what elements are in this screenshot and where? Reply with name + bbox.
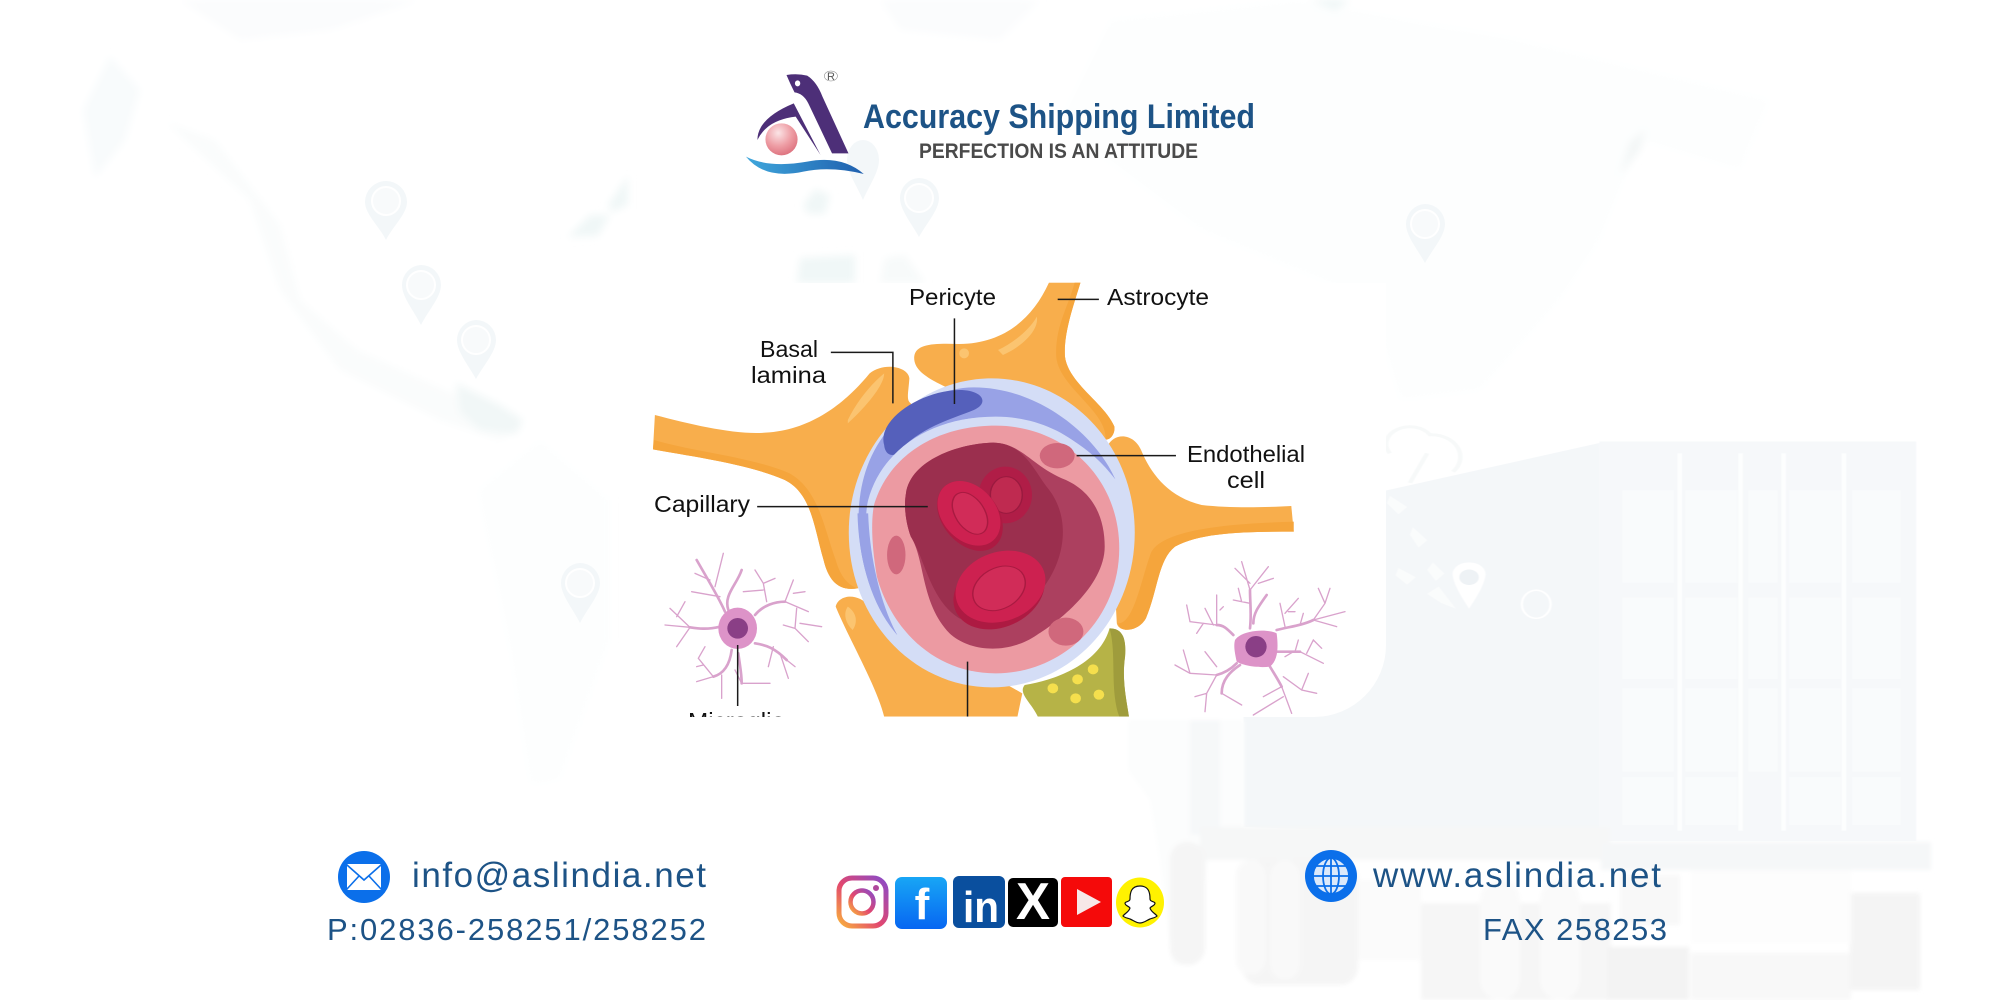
leader lines bbox=[757, 299, 1176, 717]
truck cab bbox=[1128, 720, 1244, 965]
microglia neuron left bbox=[665, 553, 822, 706]
email address: info@aslindia.net bbox=[412, 856, 706, 895]
label: Endothelial cell: cell bbox=[1227, 467, 1265, 493]
label: Endothelial cell bbox=[1187, 441, 1305, 493]
registered mark: R bbox=[827, 71, 835, 83]
icon: Facebook bbox=[895, 877, 947, 929]
blood-brain barrier illustration bbox=[653, 283, 1294, 717]
social media icons bbox=[839, 873, 1164, 932]
red blood cells bbox=[937, 466, 1046, 630]
astrocyte: top arm shading bbox=[1056, 283, 1114, 439]
astrocyte: right arm bbox=[1107, 436, 1294, 630]
icon: mail bbox=[338, 851, 390, 903]
basal lamina and pericyte sheath bbox=[859, 387, 1115, 635]
label: Endothelial cell: Endothelial bbox=[1187, 441, 1305, 467]
illustration labels bbox=[654, 284, 1305, 734]
white illustration panel bbox=[640, 283, 1386, 717]
lumen bbox=[905, 443, 1105, 649]
astrocyte: right arm shading bbox=[1118, 522, 1294, 630]
container truck background bbox=[1128, 427, 1931, 1000]
microglia neuron right bbox=[1175, 562, 1345, 715]
rear axle wheels bbox=[1242, 860, 1358, 985]
astrocyte: bottom-left highlight bbox=[845, 607, 856, 630]
chassis bbox=[1200, 827, 1610, 860]
label: Basal lamina: lamina bbox=[751, 362, 826, 388]
icon: LinkedIn bbox=[953, 876, 1005, 932]
endothelium outer ring bbox=[866, 416, 1075, 514]
astrocyte: top arm bbox=[914, 283, 1114, 440]
contact: email bbox=[327, 851, 706, 947]
phone: P:02836-258251/258252 bbox=[327, 912, 706, 947]
icon: globe bbox=[1305, 850, 1357, 902]
icon: Instagram bbox=[839, 878, 886, 926]
label: Basal lamina bbox=[751, 336, 826, 388]
astrocyte: left arm bbox=[653, 367, 930, 589]
astrocyte: left arm shading bbox=[653, 440, 858, 589]
label: Pericyte: Pericyte bbox=[909, 284, 996, 310]
icon: Snapchat bbox=[1116, 878, 1164, 928]
contact: web and fax bbox=[1305, 850, 1667, 947]
label: Microglia: Microglia bbox=[688, 708, 785, 734]
tagline: PERFECTION IS AN ATTITUDE bbox=[919, 140, 1198, 163]
icon: YouTube bbox=[1061, 877, 1112, 927]
icon: X: X bbox=[1016, 873, 1050, 931]
astrocyte: left arm highlight bbox=[848, 373, 884, 423]
label: Astrocyte: Astrocyte bbox=[1107, 284, 1209, 310]
fax: FAX 258253 bbox=[1483, 912, 1667, 947]
website: www.aslindia.net bbox=[1372, 856, 1661, 895]
label: Basal lamina: Basal bbox=[760, 336, 818, 362]
background world map bbox=[83, 0, 1770, 785]
astrocyte: highlights bbox=[959, 317, 1037, 358]
location pins bbox=[365, 140, 1445, 623]
endothelium bbox=[872, 426, 1119, 673]
glial cell with yellow granules bbox=[1023, 628, 1129, 717]
icon: Facebook: f bbox=[915, 880, 930, 929]
capillary cross-section bbox=[849, 378, 1135, 687]
rear bumper bbox=[1601, 842, 1931, 870]
company name: Accuracy Shipping Limited bbox=[863, 98, 1255, 136]
label: Capillary: Capillary bbox=[654, 491, 751, 517]
endothelial nuclei bbox=[1040, 443, 1075, 468]
logo bbox=[746, 71, 1255, 174]
pericyte nucleus bbox=[883, 390, 982, 455]
icon: X bbox=[1008, 873, 1058, 931]
icon: LinkedIn: in bbox=[963, 883, 999, 932]
logo mark: bird and pearl bbox=[746, 71, 864, 174]
blue tail bbox=[858, 513, 897, 635]
astrocyte: bottom-left arm bbox=[836, 597, 1022, 717]
